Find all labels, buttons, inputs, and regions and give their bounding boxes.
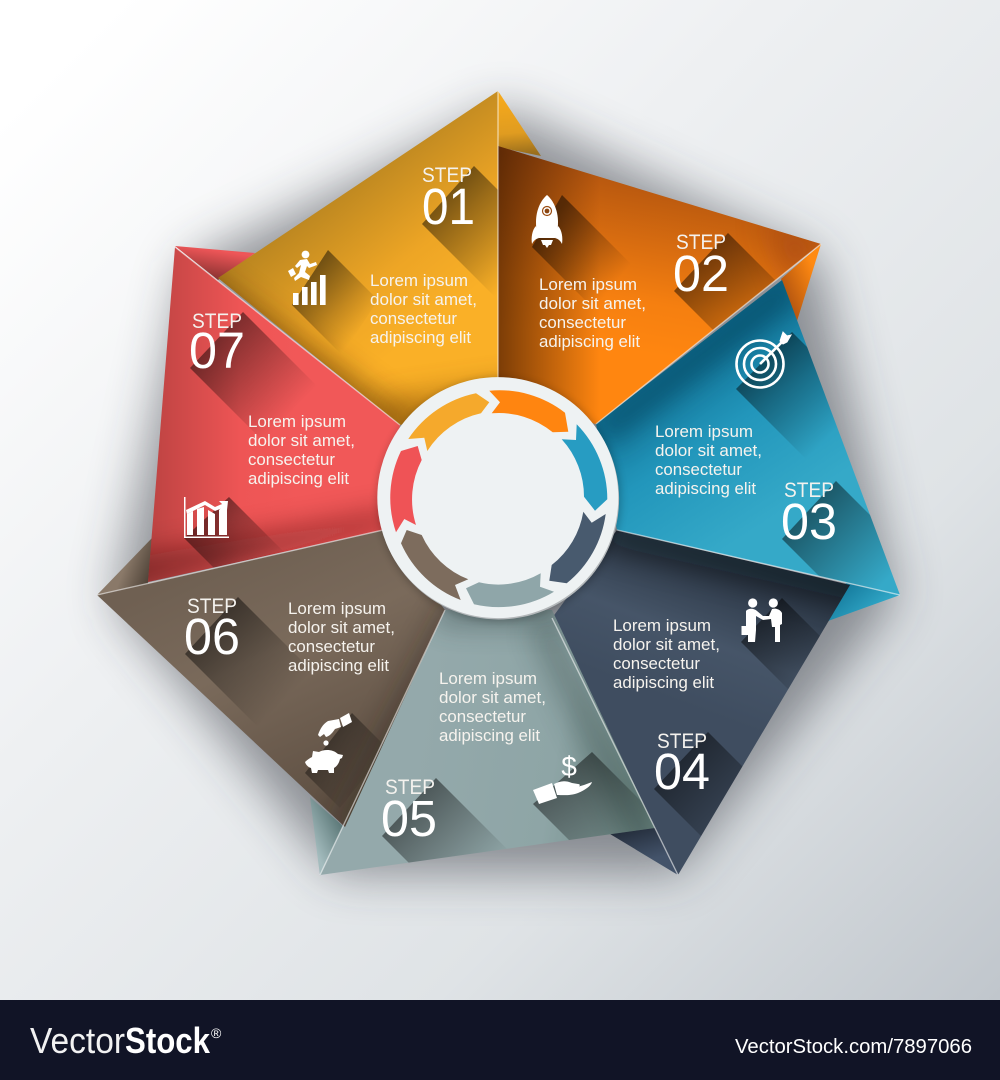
arrow: red segment [390,446,422,532]
text: step 04 description: consectetur [613,655,701,673]
arrow: yellow segment [408,393,489,451]
icon: hand with dollar [533,751,592,804]
arrow: blue segment [562,424,607,511]
label: step 05: STEP [385,776,435,799]
logo: VectorStock: Vector [30,1020,125,1061]
text: step 03 description: adipiscing elit [655,480,756,498]
text: step 07 description: adipiscing elit [248,470,349,488]
icon: bar chart with arrow [184,497,229,538]
arrow: grey segment [466,573,554,607]
text: step 02 description [539,276,646,351]
text: step 06 description: Lorem ipsum [288,600,386,618]
text: step 02 description: consectetur [539,314,627,332]
label: step 07: STEP [192,310,242,333]
text: step 05 description: adipiscing elit [439,727,540,745]
text: step 05 description: Lorem ipsum [439,670,537,688]
central ring with arrows [377,377,621,622]
logo: VectorStock [30,1020,222,1061]
label: step 04: 04 [654,743,710,800]
footer bar [0,1000,1000,1080]
text: step 03 description: dolor sit amet, [655,442,762,460]
footer url: VectorStock.com/7897066 [735,1036,972,1058]
logo: VectorStock: ® [211,1025,222,1041]
text: step 01 description: Lorem ipsum [370,272,468,290]
label: step 02: 02 [673,245,729,302]
text: step 01 description [370,272,477,347]
text: step 04 description: dolor sit amet, [613,636,720,654]
arrow: brown segment [401,530,468,600]
panel: step 02 [498,140,830,430]
text: step 06 description [288,600,395,675]
text: step 06 description: dolor sit amet, [288,619,395,637]
label: step 05: 05 [381,790,437,847]
label: step 03: STEP [784,479,834,502]
panel: step 04 [554,530,850,875]
text: step 04 description [613,617,720,692]
text: step 02 description: dolor sit amet, [539,295,646,313]
icon: rocket [532,195,562,248]
icon: piggy bank and hand [305,713,352,773]
panel: step 03 [596,280,900,595]
icon: handshake [742,598,782,642]
text: step 05 description: dolor sit amet, [439,689,546,707]
label: step 01: 01 [422,178,475,235]
label: step 03: 03 [781,493,837,550]
text: step 01 description: dolor sit amet, [370,291,477,309]
text: step 04 description: Lorem ipsum [613,617,711,635]
text: step 07 description [248,413,355,488]
label: step 02: STEP [676,231,726,254]
text: step 05 description [439,670,546,745]
text: step 05 description: consectetur [439,708,527,726]
text: step 03 description: consectetur [655,461,743,479]
panel: step 06 [97,530,445,827]
text: step 02 description: adipiscing elit [539,333,640,351]
arrow: orange segment [489,390,568,432]
panel: step 05 [320,610,655,875]
text: step 07 description: Lorem ipsum [248,413,346,431]
text: step 07 description: consectetur [248,451,336,469]
icon: businessman climbing bars [288,251,326,305]
text: step 01 description: adipiscing elit [370,329,471,347]
label: step 01: STEP [422,164,472,187]
logo: VectorStock: Stock [125,1020,211,1061]
text: step 01 description: consectetur [370,310,458,328]
label: step 06: STEP [187,595,237,618]
text: step 07 description: dolor sit amet, [248,432,355,450]
panel: step 01 [218,91,498,425]
icon: target with dart [736,332,791,388]
fold highlight edges [97,91,900,875]
text: step 03 description [655,423,762,498]
drop shadow under the folded shape [114,108,896,873]
panel: step 07 [148,247,400,582]
text: step 02 description: Lorem ipsum [539,276,637,294]
text: step 03 description: Lorem ipsum [655,423,753,441]
text: step 04 description: adipiscing elit [613,674,714,692]
label: step 06: 06 [184,608,240,665]
text: step 06 description: adipiscing elit [288,657,389,675]
icon: hand with dollar: $ [561,751,577,782]
folded flaps [97,91,900,876]
text: step 06 description: consectetur [288,638,376,656]
arrow: dark segment [549,512,606,583]
label: step 04: STEP [657,730,707,753]
label: step 07: 07 [189,322,245,379]
